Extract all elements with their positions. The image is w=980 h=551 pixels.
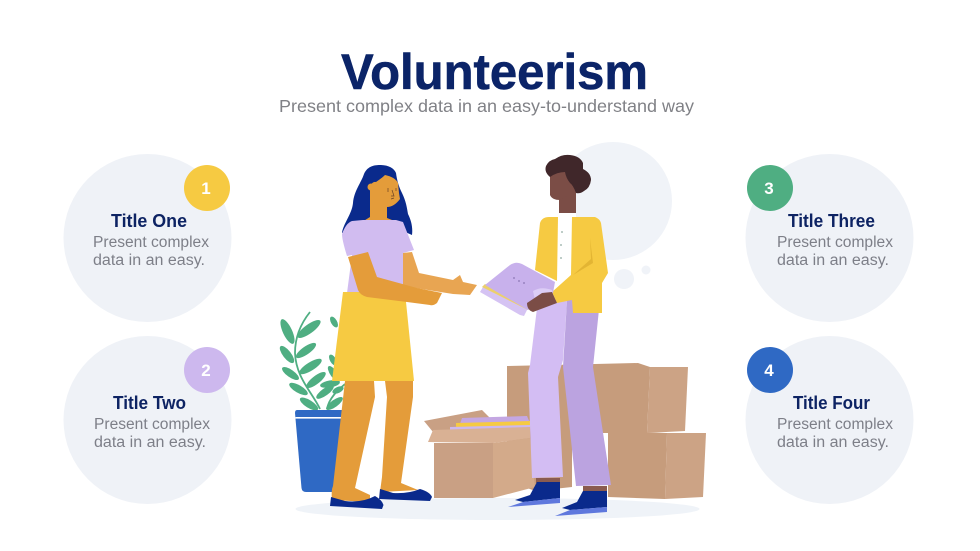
title: Volunteerism (341, 44, 648, 100)
jacket (535, 217, 558, 281)
text: title three description (777, 234, 893, 269)
neck (559, 190, 576, 213)
face and neck (362, 175, 400, 222)
badge 3 (747, 165, 793, 211)
heading: title one: Title One (111, 211, 187, 231)
badge 2: 2 (201, 361, 211, 380)
thought bubble (554, 142, 672, 289)
badge 1: 1 (201, 179, 211, 198)
badge 4 (747, 347, 793, 393)
panel: title two (64, 336, 232, 504)
skirt (332, 292, 414, 381)
text: title one description (93, 234, 209, 269)
panel: title three (746, 154, 914, 322)
text: title two description (94, 416, 210, 451)
shoes (515, 482, 560, 502)
illustration: two volunteers with boxes (277, 142, 706, 520)
man (480, 155, 611, 516)
text: title one description: Present complex (93, 234, 209, 251)
badge 2 (184, 347, 230, 393)
text: title two description: Present complex (94, 416, 210, 433)
near arm (348, 252, 442, 305)
ground shadow (296, 498, 700, 520)
woman (330, 165, 477, 509)
white collar glow (550, 193, 576, 217)
trousers (528, 300, 567, 478)
far arm (403, 252, 477, 295)
face details (388, 188, 396, 199)
heading: title three: Title Three (788, 211, 875, 231)
face (550, 170, 578, 200)
text: title four description: Present complex (777, 416, 893, 433)
top (342, 220, 414, 293)
stacked cardboard boxes (507, 363, 706, 499)
book (480, 263, 555, 316)
legs (332, 381, 375, 502)
text: title four description (777, 416, 893, 451)
panel: title one (64, 154, 232, 322)
ankles (536, 478, 560, 483)
hair (546, 155, 591, 193)
badge 1 (184, 165, 230, 211)
shoes (330, 496, 384, 509)
text: title three description: Present complex (777, 234, 893, 251)
text: title three description: data in an easy. (777, 252, 889, 269)
shirt (556, 217, 572, 285)
plant in blue pot (277, 312, 345, 492)
hand (527, 292, 557, 312)
text: title four description: data in an easy. (777, 434, 889, 451)
heading: title four: Title Four (793, 393, 870, 413)
text: title one description: data in an easy. (93, 252, 205, 269)
open cardboard box (424, 410, 535, 498)
badge 3: 3 (764, 179, 774, 198)
hair (342, 165, 412, 235)
heading: title two: Title Two (113, 393, 186, 413)
badge 4: 4 (764, 361, 774, 380)
shirt buttons (560, 231, 563, 259)
panel: title four (746, 336, 914, 504)
text: title two description: data in an easy. (94, 434, 206, 451)
subtitle: Present complex data in an easy-to-understand way (279, 96, 694, 116)
